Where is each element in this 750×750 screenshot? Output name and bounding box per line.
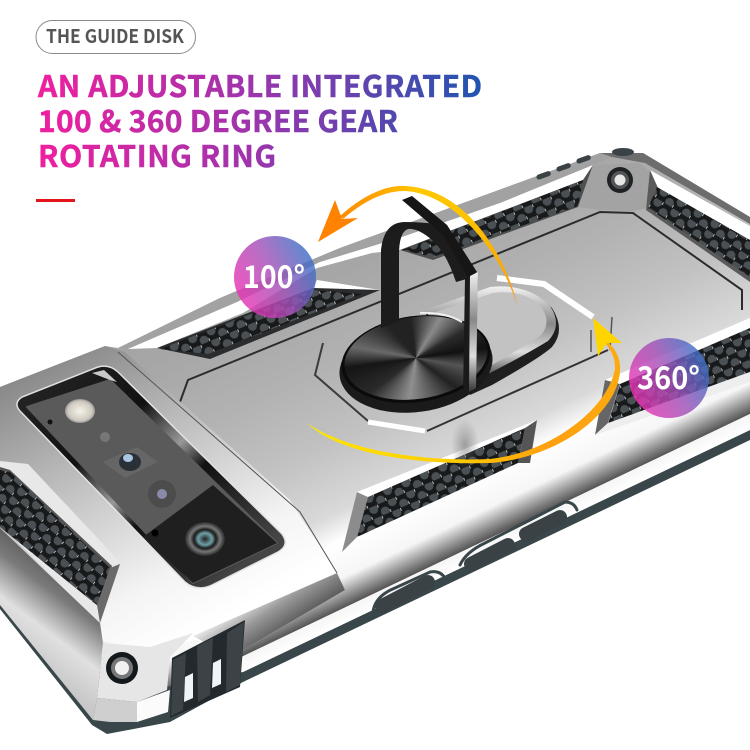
lens: small <box>148 480 176 508</box>
phone case <box>0 148 750 734</box>
plate outline <box>180 212 742 402</box>
title <box>37 62 482 176</box>
grip strip: lower middle <box>342 420 537 552</box>
top side edge <box>118 153 612 349</box>
octagon outline <box>315 278 612 431</box>
lower left corner <box>93 633 193 722</box>
camera dark glass <box>143 485 277 583</box>
camera block <box>0 346 345 655</box>
arrow: 360 degree rotation <box>307 318 622 463</box>
disk brushed surface <box>339 307 493 409</box>
grip strip: top left <box>157 280 380 359</box>
top white band <box>128 165 593 349</box>
camera block front face <box>193 573 345 655</box>
lower left bevel <box>0 528 103 720</box>
grip strip: top middle <box>400 165 593 260</box>
grip strip: left <box>0 461 120 623</box>
disk highlight arc <box>420 313 462 322</box>
grip strip: lower right <box>595 318 750 435</box>
badge: 100 degrees: 100° <box>243 252 305 297</box>
ring pocket <box>425 286 559 395</box>
clip fins <box>170 620 245 718</box>
volume buttons <box>373 502 577 612</box>
ring strap <box>402 196 477 278</box>
screw: bottom left <box>106 652 138 684</box>
badge: the guide disk: THE GUIDE DISK <box>46 22 185 49</box>
gear disk <box>333 306 499 422</box>
red accent line <box>36 199 75 202</box>
arrow: 100 degree rotation <box>318 186 518 308</box>
title: AN ADJUSTABLE INTEGRATED <box>37 62 482 106</box>
screw: top right <box>607 167 633 193</box>
title: ROTATING RING <box>38 132 276 176</box>
case face <box>0 153 750 690</box>
badge: 360 degrees <box>629 338 709 418</box>
title: 100 & 360 DEGREE GEAR <box>38 97 398 141</box>
badge: 100 degrees <box>234 236 316 318</box>
upper corner plate <box>578 163 650 211</box>
badge: 360 degrees: 360° <box>637 353 700 398</box>
camera window frame <box>17 366 285 588</box>
ring arch <box>381 222 470 328</box>
microphone dot <box>100 432 110 442</box>
top corner cap and side buttons <box>536 148 634 180</box>
ring silver facet <box>469 272 478 392</box>
metal reflection <box>451 419 479 471</box>
camera glass <box>27 380 277 583</box>
sensor dot <box>48 420 52 424</box>
frame highlight <box>92 370 117 382</box>
right side edge <box>600 153 750 224</box>
grip strip: top right <box>646 170 750 282</box>
flash <box>65 399 95 423</box>
ring stand <box>381 196 478 397</box>
case outer rim <box>0 430 750 734</box>
dot on dark glass <box>152 530 158 536</box>
ring right leg <box>463 272 478 397</box>
lens: telephoto <box>103 447 158 478</box>
main lens <box>185 522 225 556</box>
